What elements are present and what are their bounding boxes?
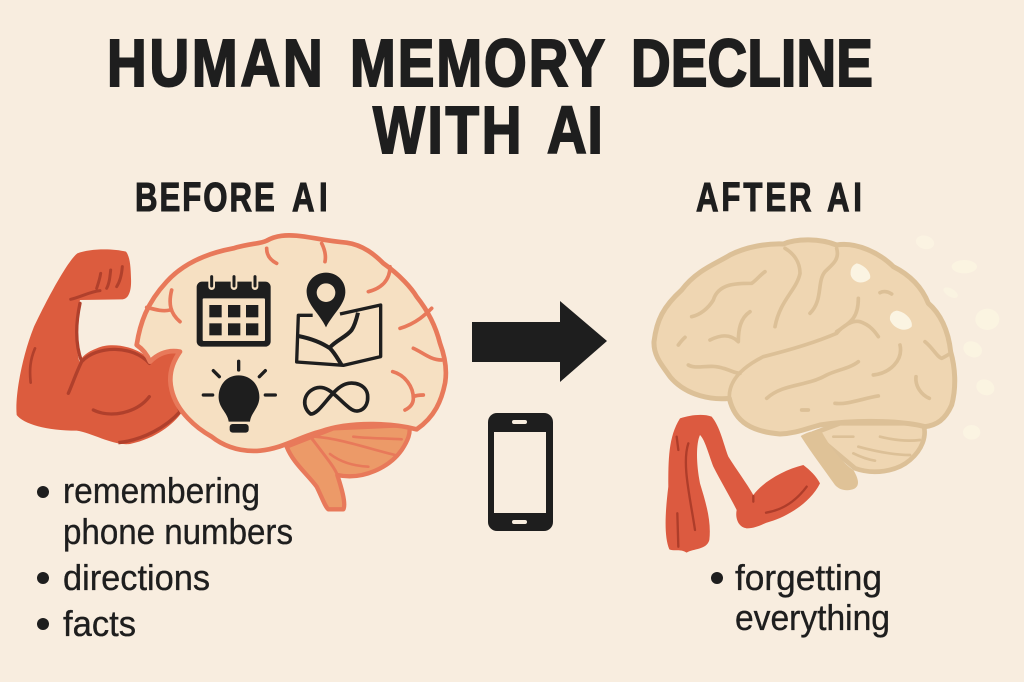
panel: after AI illustration [654,233,999,553]
list: after AI [711,557,890,638]
list: before AI: facts [63,603,136,644]
arrow [472,301,607,382]
icon: smartphone [488,413,553,531]
brain outline [137,235,446,451]
heading: after AI: AI [827,174,862,220]
title: MEMORY [350,26,605,100]
title [107,26,873,167]
list: after AI: everything [735,597,890,638]
heading: after AI [696,174,862,220]
brain folds [678,248,950,410]
icon: weak arm [666,415,820,553]
heading: before AI: BEFORE [135,174,275,220]
brain folds [147,243,442,410]
brain outline [654,240,955,434]
memory fade spots [851,233,999,440]
icon: map with pin [297,273,381,365]
title: AI [547,93,603,167]
list: before AI: directions [63,557,210,598]
list: before AI: remembering [63,470,260,511]
cerebellum and stem [287,425,410,509]
icon: infinity loop [305,383,368,414]
icon: calendar [197,277,271,347]
list: before AI: phone numbers [63,511,293,552]
list: before AI [37,470,293,644]
heading: before AI: AI [292,174,328,220]
cerebellum and stem [801,423,925,490]
icon: light bulb [203,361,275,433]
heading: after AI: AFTER [696,174,812,220]
title: HUMAN [107,26,323,100]
icon: flexed muscle arm [16,249,182,444]
list: after AI: forgetting [735,557,882,598]
panel: before AI illustration [16,235,446,509]
title: DECLINE [631,26,873,100]
title: WITH [373,93,521,167]
